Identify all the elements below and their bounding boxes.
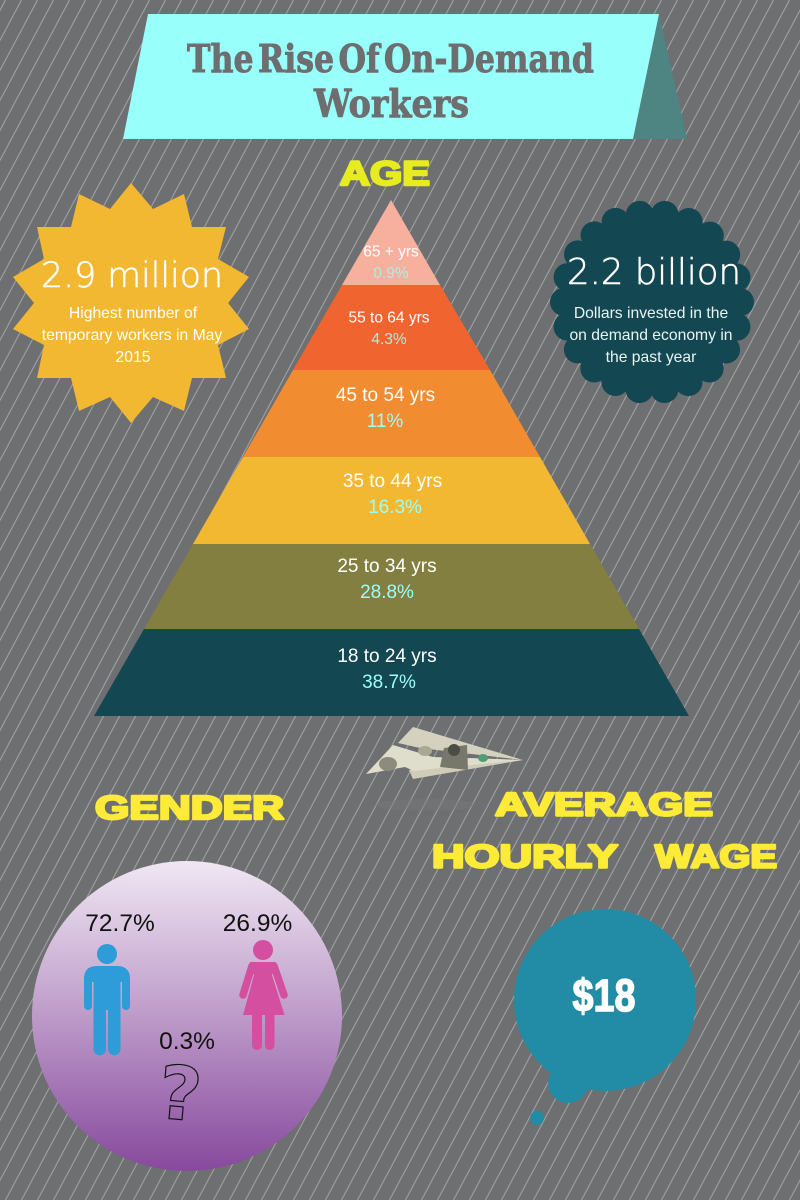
band: 45 to 54: 45 to 54 yrs xyxy=(336,385,435,406)
female share: 26.9% xyxy=(223,910,292,937)
starburst callout: 2.9 million: 2.9 million xyxy=(41,256,223,296)
band: 55 to 64: 55 to 64 yrs xyxy=(348,310,430,326)
band: 18 to 24 xyxy=(94,629,689,716)
starburst callout: 2.9 million: Highest number of xyxy=(69,305,198,322)
panel: wage speech bubble xyxy=(514,909,696,1125)
heading: average hourly wage xyxy=(432,786,777,874)
band: 18 to 24: 38.7% xyxy=(362,672,416,693)
starburst callout: 2.9 million: 2015 xyxy=(116,349,151,366)
title banner xyxy=(123,14,687,139)
scalloped callout: 2.2 billion xyxy=(564,214,741,390)
band: 35 to 44: 35 to 44 yrs xyxy=(343,471,442,492)
heading: average hourly wage: AVERAGE xyxy=(495,786,713,822)
age pyramid chart xyxy=(94,200,689,716)
icon: woman xyxy=(243,940,284,1050)
band: 25 to 34: 25 to 34 yrs xyxy=(337,556,437,577)
heading: average hourly wage: WAGE xyxy=(655,838,777,874)
other share: 0.3% xyxy=(159,1028,215,1055)
band: 18 to 24: 18 to 24 yrs xyxy=(337,646,437,667)
heading: age: AGE xyxy=(340,155,430,193)
band: 35 to 44 xyxy=(193,457,590,544)
band: 45 to 54: 11% xyxy=(367,411,403,432)
band: 45 to 54 xyxy=(243,370,540,457)
panel: gender circle xyxy=(32,861,342,1171)
band: 25 to 34 xyxy=(144,544,639,629)
male share: 72.7% xyxy=(85,910,155,937)
title: Workers xyxy=(313,81,469,126)
scalloped callout: 2.2 billion: Dollars invested in the xyxy=(574,305,728,322)
scalloped callout: 2.2 billion: on demand economy in xyxy=(569,327,733,344)
title xyxy=(187,36,594,126)
heading: average hourly wage: HOURLY xyxy=(432,838,618,874)
band: 65+: 0.9% xyxy=(373,265,409,282)
band: 55 to 64: 4.3% xyxy=(371,331,407,348)
heading: gender: GENDER xyxy=(95,789,284,826)
title: The Rise Of On-Demand xyxy=(187,36,594,81)
starburst callout: 2.9 million: temporary workers in May xyxy=(42,327,222,344)
scalloped callout: 2.2 billion: the past year xyxy=(606,349,696,366)
icon: man xyxy=(84,944,130,1055)
band: 55 to 64 xyxy=(293,285,490,370)
band: 65+ xyxy=(342,200,440,285)
band: 35 to 44: 16.3% xyxy=(368,497,422,518)
scalloped callout: 2.2 billion: 2.2 billion xyxy=(567,252,741,293)
band: 25 to 34: 28.8% xyxy=(360,582,414,603)
icon: question mark: ? xyxy=(155,1050,205,1139)
icon: dollar paper plane xyxy=(366,727,523,811)
band: 65+: 65 + yrs xyxy=(363,244,419,260)
wage value: $18 xyxy=(572,970,636,1021)
starburst callout: 2.9 million xyxy=(13,183,249,423)
